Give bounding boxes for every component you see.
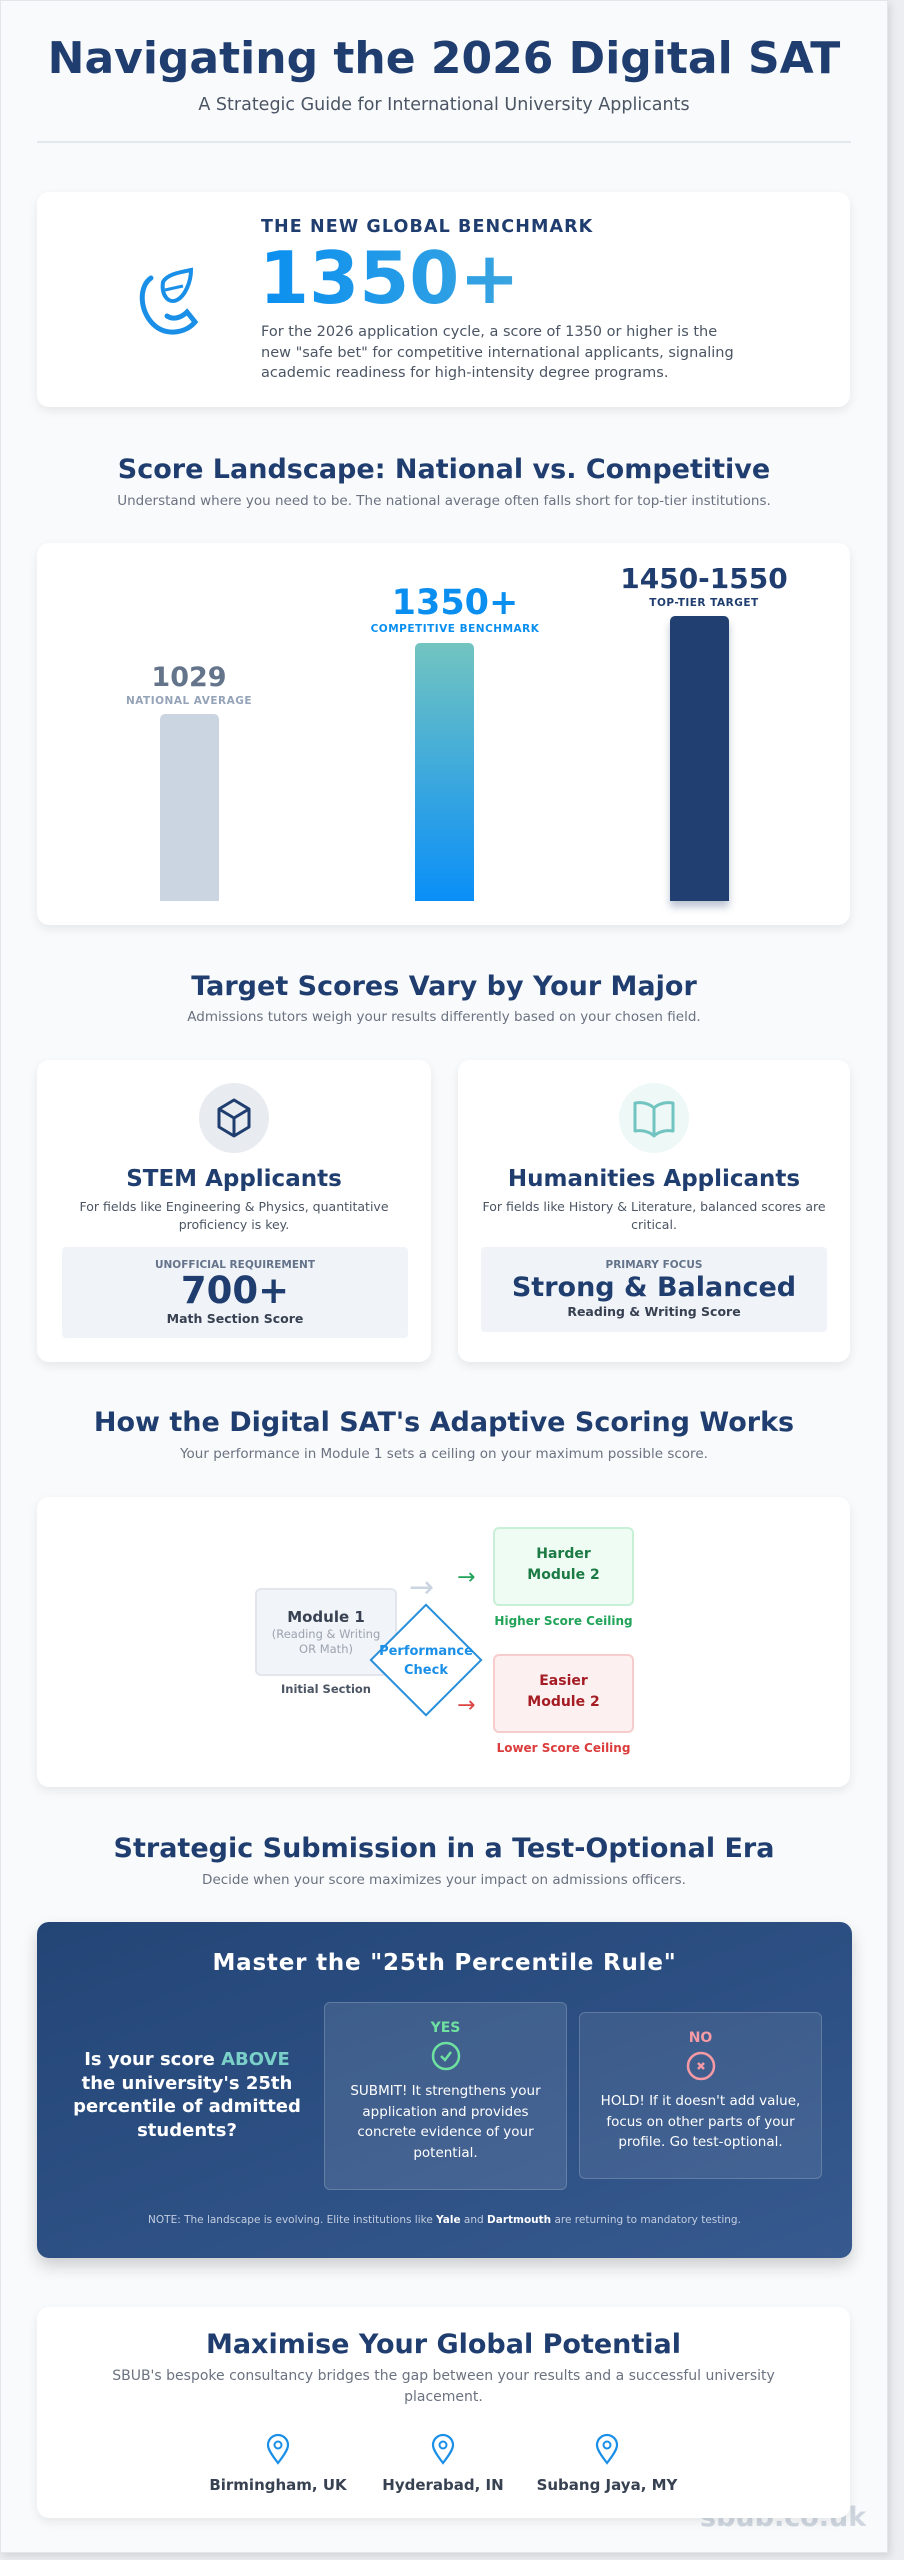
location: Birmingham: Birmingham, UK [209, 2476, 347, 2494]
note: NOTE: The landscape is evolving. Elite institutions like Yale and Dartmouth are returning to mandatory testing. [148, 2214, 741, 2226]
text: SBUB's bespoke consultancy bridges the gap between your results and a successful university placement. [112, 2368, 775, 2405]
location: Birmingham [209, 2434, 347, 2494]
no box: NO [689, 2030, 712, 2046]
subheading: Understand where you need to be. The national average often falls short for top-tier institutions. [117, 493, 771, 509]
bar: competitive: COMPETITIVE BENCHMARK [371, 623, 539, 635]
label: THE NEW GLOBAL BENCHMARK [261, 217, 593, 237]
location: Subang Jaya: Subang Jaya, MY [537, 2476, 677, 2494]
caption green: Higher Score Ceiling [494, 1614, 633, 1628]
harder module: Harder [536, 1546, 591, 1562]
panel: call to action [37, 2307, 850, 2518]
bar: top tier [620, 562, 788, 912]
icon: x [686, 2052, 716, 2080]
diamond: performance check [370, 1604, 482, 1716]
subtitle: A Strategic Guide for International University Applicants [198, 95, 690, 115]
focus box: Strong & Balanced [512, 1272, 796, 1303]
caption red: Lower Score Ceiling [497, 1741, 630, 1755]
heading: STEM Applicants [126, 1166, 342, 1192]
harder module: Module 2 [527, 1567, 600, 1583]
icon: check [432, 2042, 460, 2070]
focus box: PRIMARY FOCUS [606, 1259, 702, 1271]
text: For fields like Engineering & Physics, quantitative proficiency is key. [79, 1199, 389, 1232]
harder module [493, 1527, 634, 1606]
icon: cube [199, 1083, 269, 1153]
arrow: gray: → [409, 1570, 434, 1605]
subheading: Decide when your score maximizes your impact on admissions officers. [202, 1872, 686, 1888]
location: Subang Jaya [537, 2434, 678, 2494]
no box: HOLD! If it doesn't add value, focus on other parts of your profile. Go test-optional. [601, 2093, 800, 2150]
requirement box [62, 1247, 408, 1338]
focus box: Reading & Writing Score [567, 1304, 741, 1319]
module 1: OR Math) [299, 1642, 353, 1656]
panel: humanities [458, 1060, 850, 1362]
bar: top tier: TOP-TIER TARGET [649, 597, 759, 609]
bar: national: 1029 [151, 662, 227, 693]
question: Is your score ABOVE the university's 25th percentile of admitted students? [73, 2049, 301, 2140]
bar: top tier: 1450-1550 [620, 562, 788, 595]
panel: STEM [37, 1060, 431, 1362]
caption: Initial Section [281, 1682, 371, 1696]
diamond: performance check: Check [404, 1663, 448, 1678]
heading: adaptive: How the Digital SAT's Adaptive Scoring Works [94, 1407, 794, 1438]
bar: competitive [371, 583, 540, 901]
no box [579, 2012, 822, 2179]
heading: Maximise Your Global Potential [206, 2329, 681, 2360]
module 1: Module 1 [287, 1608, 365, 1626]
yes box: YES [431, 2020, 460, 2036]
watermark: sbub.co.uk [700, 2502, 866, 2533]
subheading: Admissions tutors weigh your results differently based on your chosen field. [187, 1009, 701, 1025]
yes box [324, 2002, 567, 2190]
location: Hyderabad [382, 2434, 504, 2494]
bar: national [126, 662, 252, 901]
requirement box: Math Section Score [167, 1311, 303, 1326]
panel: 25th percentile rule [37, 1922, 852, 2258]
panel: flow diagram [37, 1497, 850, 1787]
yes box: SUBMIT! It strengthens your application and provides concrete evidence of your potential. [350, 2083, 541, 2160]
easier module: Easier [539, 1673, 588, 1689]
big number: 1350+ [259, 236, 520, 320]
bar chart [37, 543, 850, 925]
heading: majors: Target Scores Vary by Your Major [191, 971, 697, 1002]
panel: global benchmark [37, 192, 850, 407]
easier module [493, 1654, 634, 1733]
text: For fields like History & Literature, balanced scores are critical. [482, 1199, 826, 1232]
bar: national: NATIONAL AVERAGE [126, 695, 252, 707]
subheading: Your performance in Module 1 sets a ceiling on your maximum possible score. [180, 1446, 708, 1462]
location: Hyderabad: Hyderabad, IN [382, 2476, 504, 2494]
module 1: (Reading & Writing [272, 1627, 380, 1641]
arrow: green: → [457, 1565, 475, 1590]
heading: Humanities Applicants [508, 1166, 800, 1192]
arrow: red: → [457, 1693, 475, 1718]
bar: competitive: 1350+ [392, 583, 518, 623]
easier module: Module 2 [527, 1694, 600, 1710]
requirement box: UNOFFICIAL REQUIREMENT [155, 1259, 315, 1271]
focus box [481, 1247, 827, 1332]
panel title: Master the "25th Percentile Rule" [212, 1950, 677, 1976]
heading: score landscape: Score Landscape: National vs. Competitive [118, 454, 770, 485]
diamond: performance check: Performance [379, 1644, 473, 1659]
icon: logo swirl [140, 268, 198, 335]
icon: book [619, 1083, 689, 1153]
text block: For the 2026 application cycle, a score of 1350 or higher is the new "safe bet" for competitive international applicants, signaling academic readiness for high-intensity degree programs. [261, 324, 734, 381]
title: Navigating the 2026 Digital SAT [48, 33, 840, 84]
heading: submission: Strategic Submission in a Test-Optional Era [114, 1833, 774, 1864]
module 1 [255, 1588, 397, 1676]
requirement box: 700+ [181, 1269, 289, 1312]
